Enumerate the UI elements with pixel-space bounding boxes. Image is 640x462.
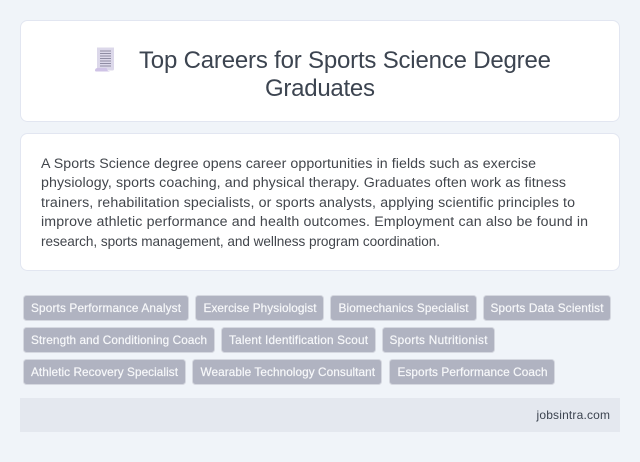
tag: Sports Performance Analyst: Sports Performance Analyst [31, 301, 182, 315]
tag: Exercise Physiologist [196, 296, 324, 320]
description text [41, 156, 588, 249]
tag: Strength and Conditioning Coach [24, 328, 214, 352]
tag: Sports Nutritionist: Sports Nutritionist [390, 333, 488, 347]
tag: Biomechanics Specialist [330, 296, 476, 320]
tag: Athletic Recovery Specialist: Athletic Recovery Specialist [31, 365, 179, 379]
icon: paper scroll [95, 48, 114, 72]
tag: Esports Performance Coach: Esports Performance Coach [398, 365, 548, 379]
tag: Sports Performance Analyst [24, 296, 188, 320]
tag: Sports Nutritionist [382, 328, 494, 352]
footer source text: jobsintra.com [536, 408, 610, 422]
tag: Esports Performance Coach [390, 360, 554, 384]
tag: Strength and Conditioning Coach: Strength and Conditioning Coach [31, 333, 207, 347]
tag: Biomechanics Specialist: Biomechanics Specialist [338, 301, 469, 315]
description text: physiology, sports coaching, and physical therapy. Graduates often work as fitness [41, 175, 566, 191]
panel: description [20, 134, 620, 270]
panel: title [20, 20, 620, 122]
tag: Sports Data Scientist [484, 296, 610, 320]
description text: improve athletic performance and health outcomes. Employment can also be found in [41, 214, 588, 230]
title text [139, 47, 551, 102]
tag: Wearable Technology Consultant: Wearable Technology Consultant [200, 365, 376, 379]
title text: Graduates [265, 75, 375, 102]
tag list [24, 296, 610, 384]
title text: Top Careers for Sports Science Degree [139, 47, 551, 74]
tag: Wearable Technology Consultant [192, 360, 382, 384]
tag: Exercise Physiologist: Exercise Physiologist [204, 301, 317, 315]
tag: Athletic Recovery Specialist [24, 360, 186, 384]
tag: Sports Data Scientist: Sports Data Scientist [490, 301, 604, 315]
description text: A Sports Science degree opens career opportunities in fields such as exercise [41, 156, 536, 172]
tag: Talent Identification Scout: Talent Identification Scout [229, 333, 369, 347]
description text: research, sports management, and wellness program coordination. [41, 234, 440, 249]
description text: trainers, rehabilitation specialists, or sports analysts, applying scientific principles to [41, 195, 575, 211]
tag: Talent Identification Scout [222, 328, 376, 352]
footer bar [20, 398, 620, 432]
